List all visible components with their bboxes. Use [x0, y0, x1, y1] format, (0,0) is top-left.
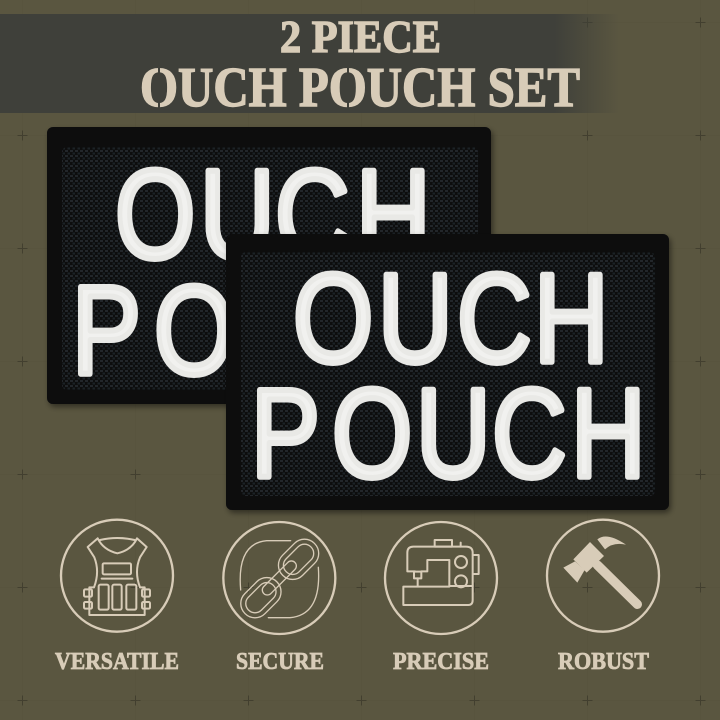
title: OUCH POUCH SET — [140, 57, 580, 119]
title banner — [0, 14, 720, 113]
patch text: front: OUCH — [293, 249, 609, 389]
patch: back — [47, 127, 491, 404]
patch text: front — [251, 249, 646, 504]
patch text: back — [72, 145, 468, 401]
label: robust: ROBUST — [558, 649, 649, 675]
icon: hammer — [547, 520, 659, 632]
icon: chain link — [223, 522, 335, 634]
patch: front — [226, 234, 669, 510]
title: 2 PIECE — [280, 12, 441, 62]
label: secure: SECURE — [236, 649, 324, 675]
label: precise: PRECISE — [393, 649, 489, 675]
patch text: back: POUCH — [72, 261, 468, 401]
patch text: front: POUCH — [251, 364, 646, 504]
patch text: back: OUCH — [115, 145, 431, 285]
title — [140, 12, 580, 119]
icon: sewing machine — [385, 522, 497, 634]
icon: vest — [61, 520, 173, 632]
label: versatile: VERSATILE — [55, 649, 179, 675]
